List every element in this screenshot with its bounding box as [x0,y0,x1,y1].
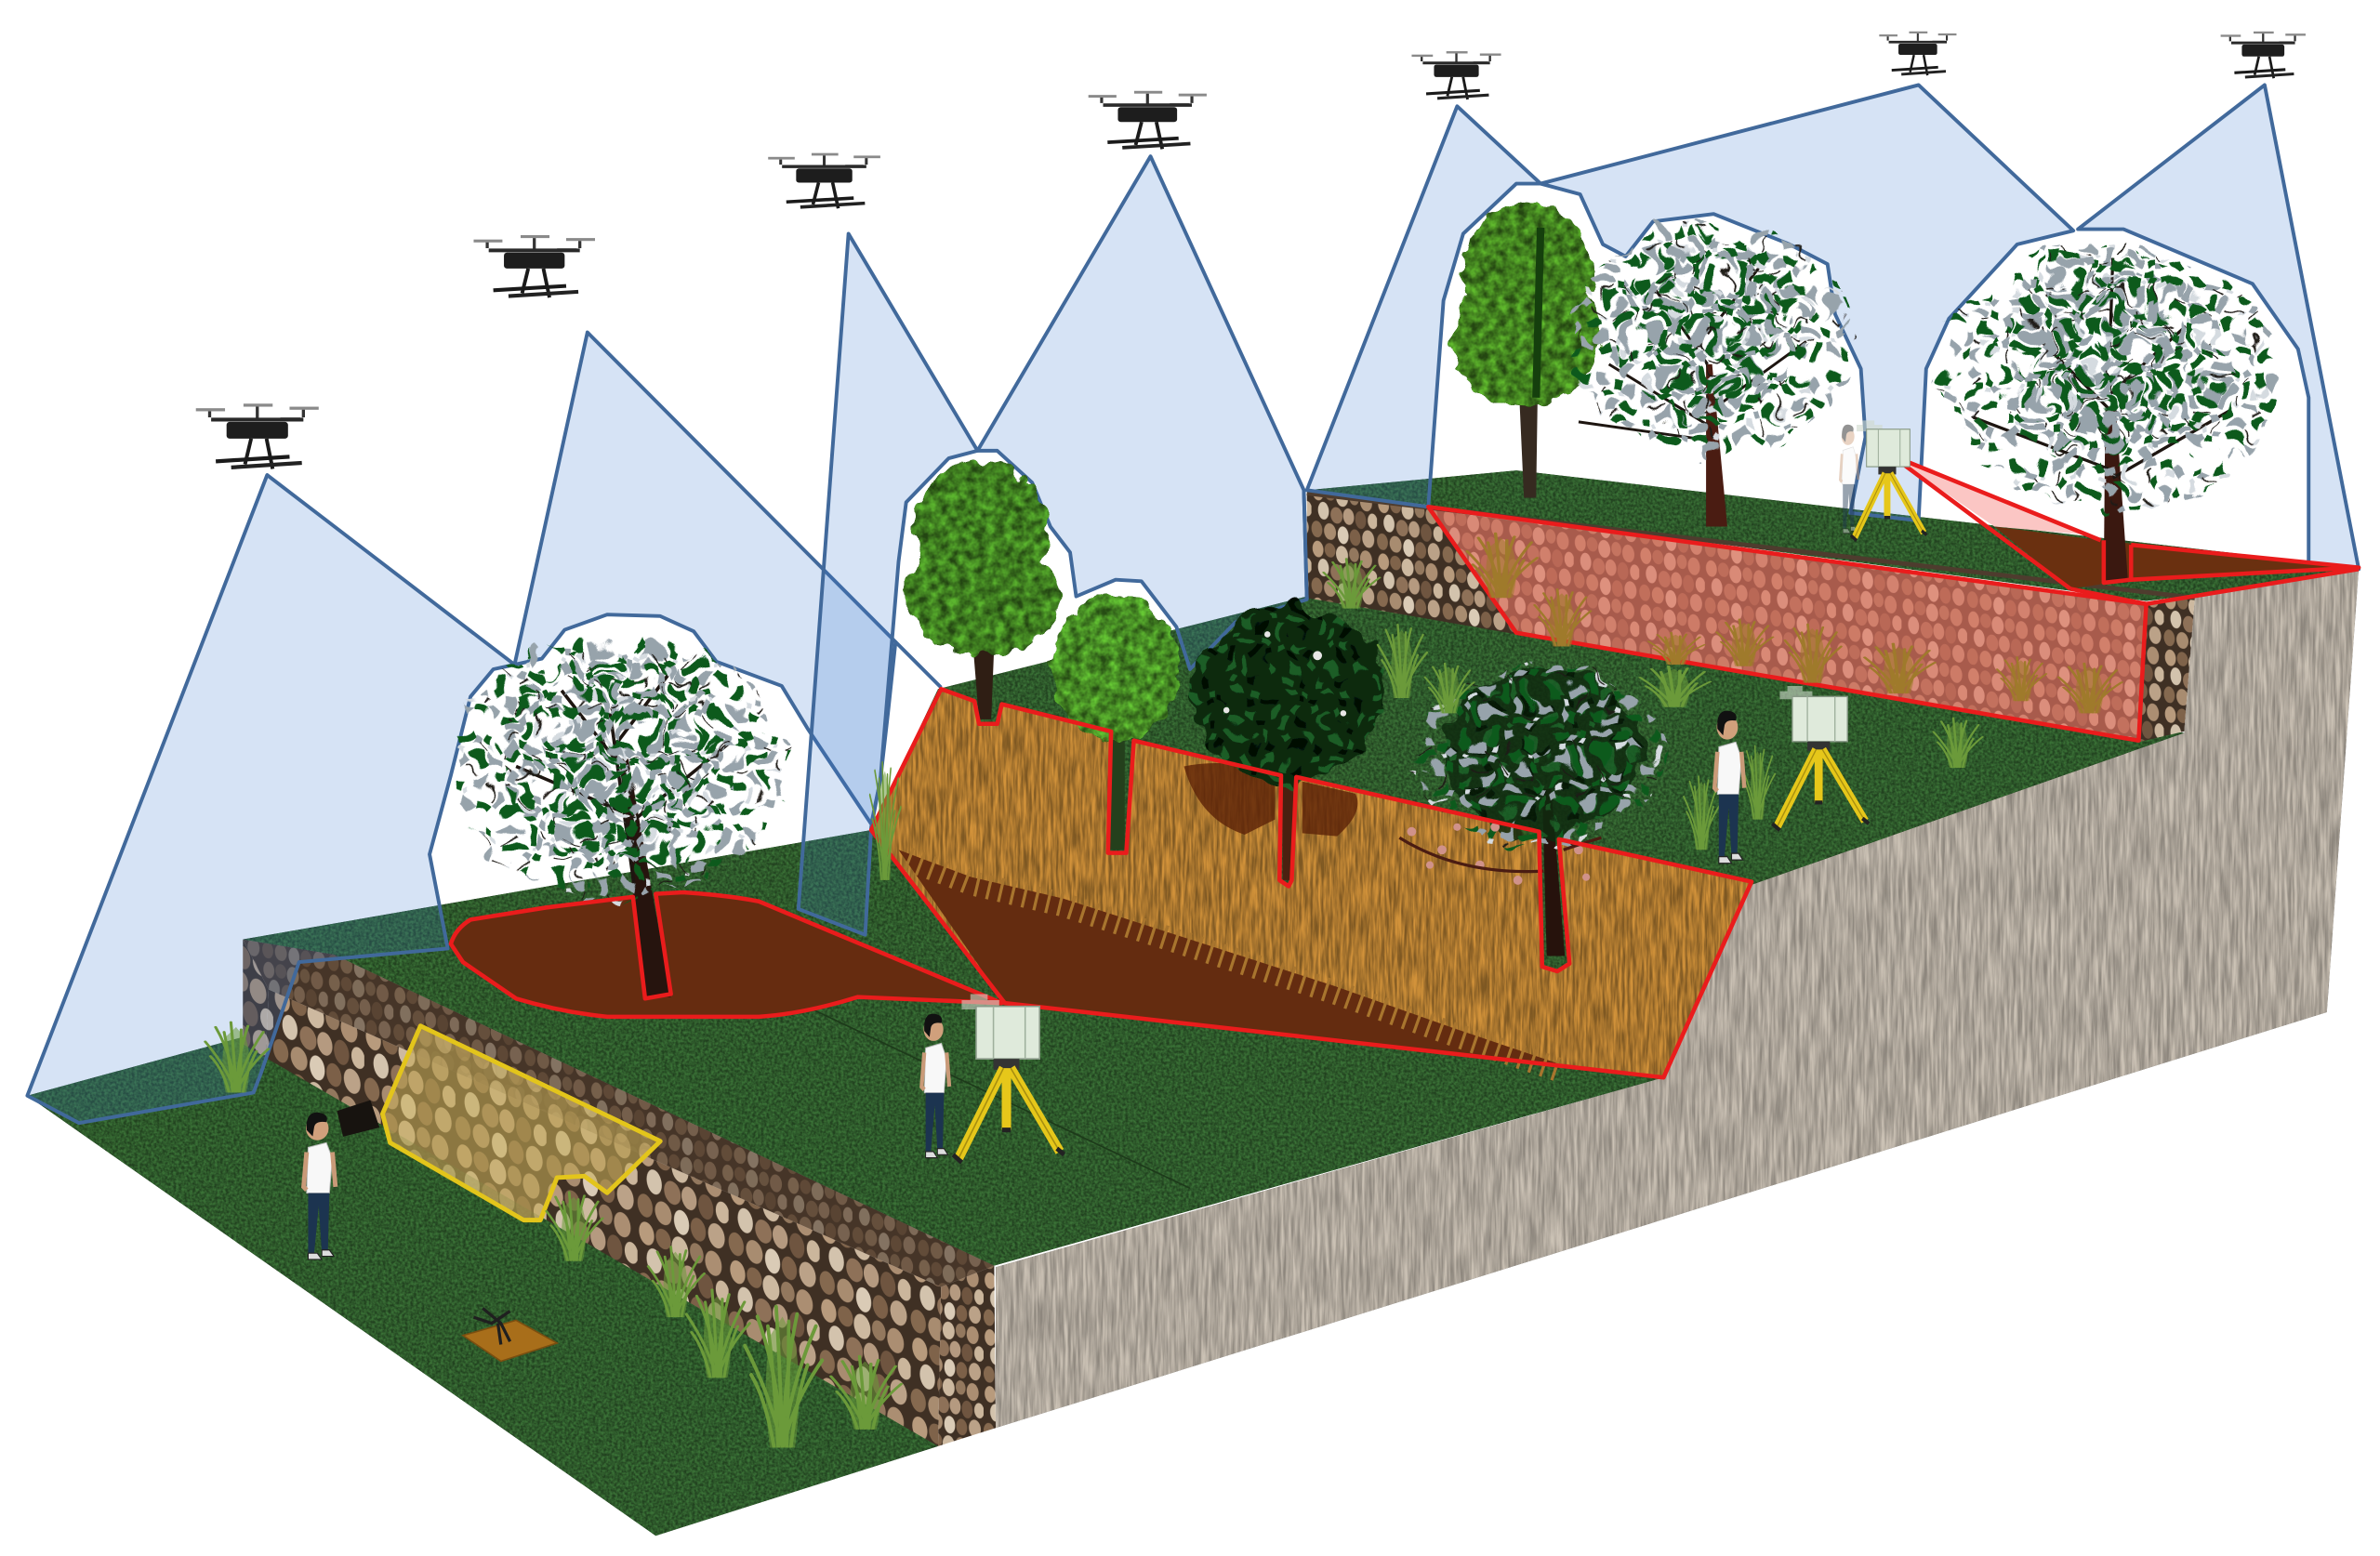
red soil patch under first tree [451,892,1002,1017]
tree: sparse tree on top terrace [1572,223,1852,527]
grey soil cross-section wall [996,569,2359,1428]
yellow highlighted rock patch [382,1026,660,1220]
pink laser scan sector [1891,455,2081,534]
ochre grass tufts on red rock [1467,534,2122,713]
middle grass terrace [243,830,1663,1266]
brown soil patch on top terrace [1994,527,2359,588]
equipment case [337,1101,379,1137]
upper grass terrace [871,597,2184,1077]
laser scanner on yellow tripod, top [1851,420,1926,541]
red outlines of scanned areas [451,455,2359,1077]
surveyor upper terrace [1714,711,1744,864]
lower grass ground [27,1035,938,1536]
upper gabion retaining wall [1307,494,2195,742]
tree: tall leafy tree on top terrace [1452,204,1601,498]
tree: small leafy green tree [1051,595,1180,850]
surveyor middle [921,1014,949,1158]
surveyor top terrace, faded [1840,425,1858,534]
ochre scanned slope patch [871,689,1752,1077]
drone landed on board [463,1308,557,1361]
top grass terrace [1307,470,2359,601]
tree: large sparse tree right [1940,243,2280,583]
lower gabion retaining wall [243,940,996,1446]
green grass tufts [205,559,1982,1448]
tree: blue-grey tree with pink blossoms [1399,665,1665,956]
laser scanner on yellow tripod, middle [1772,686,1869,830]
laser scanner on yellow tripod, lower [953,994,1064,1163]
tree: leafy green tree on slope [906,461,1058,719]
tree: large sparse tree left [453,636,787,997]
surveyor lower left [304,1113,336,1259]
drones in flight [196,32,2306,468]
tree: dark tree with white blossoms [1190,607,1384,880]
blue UAV coverage polygons [27,85,2359,1123]
